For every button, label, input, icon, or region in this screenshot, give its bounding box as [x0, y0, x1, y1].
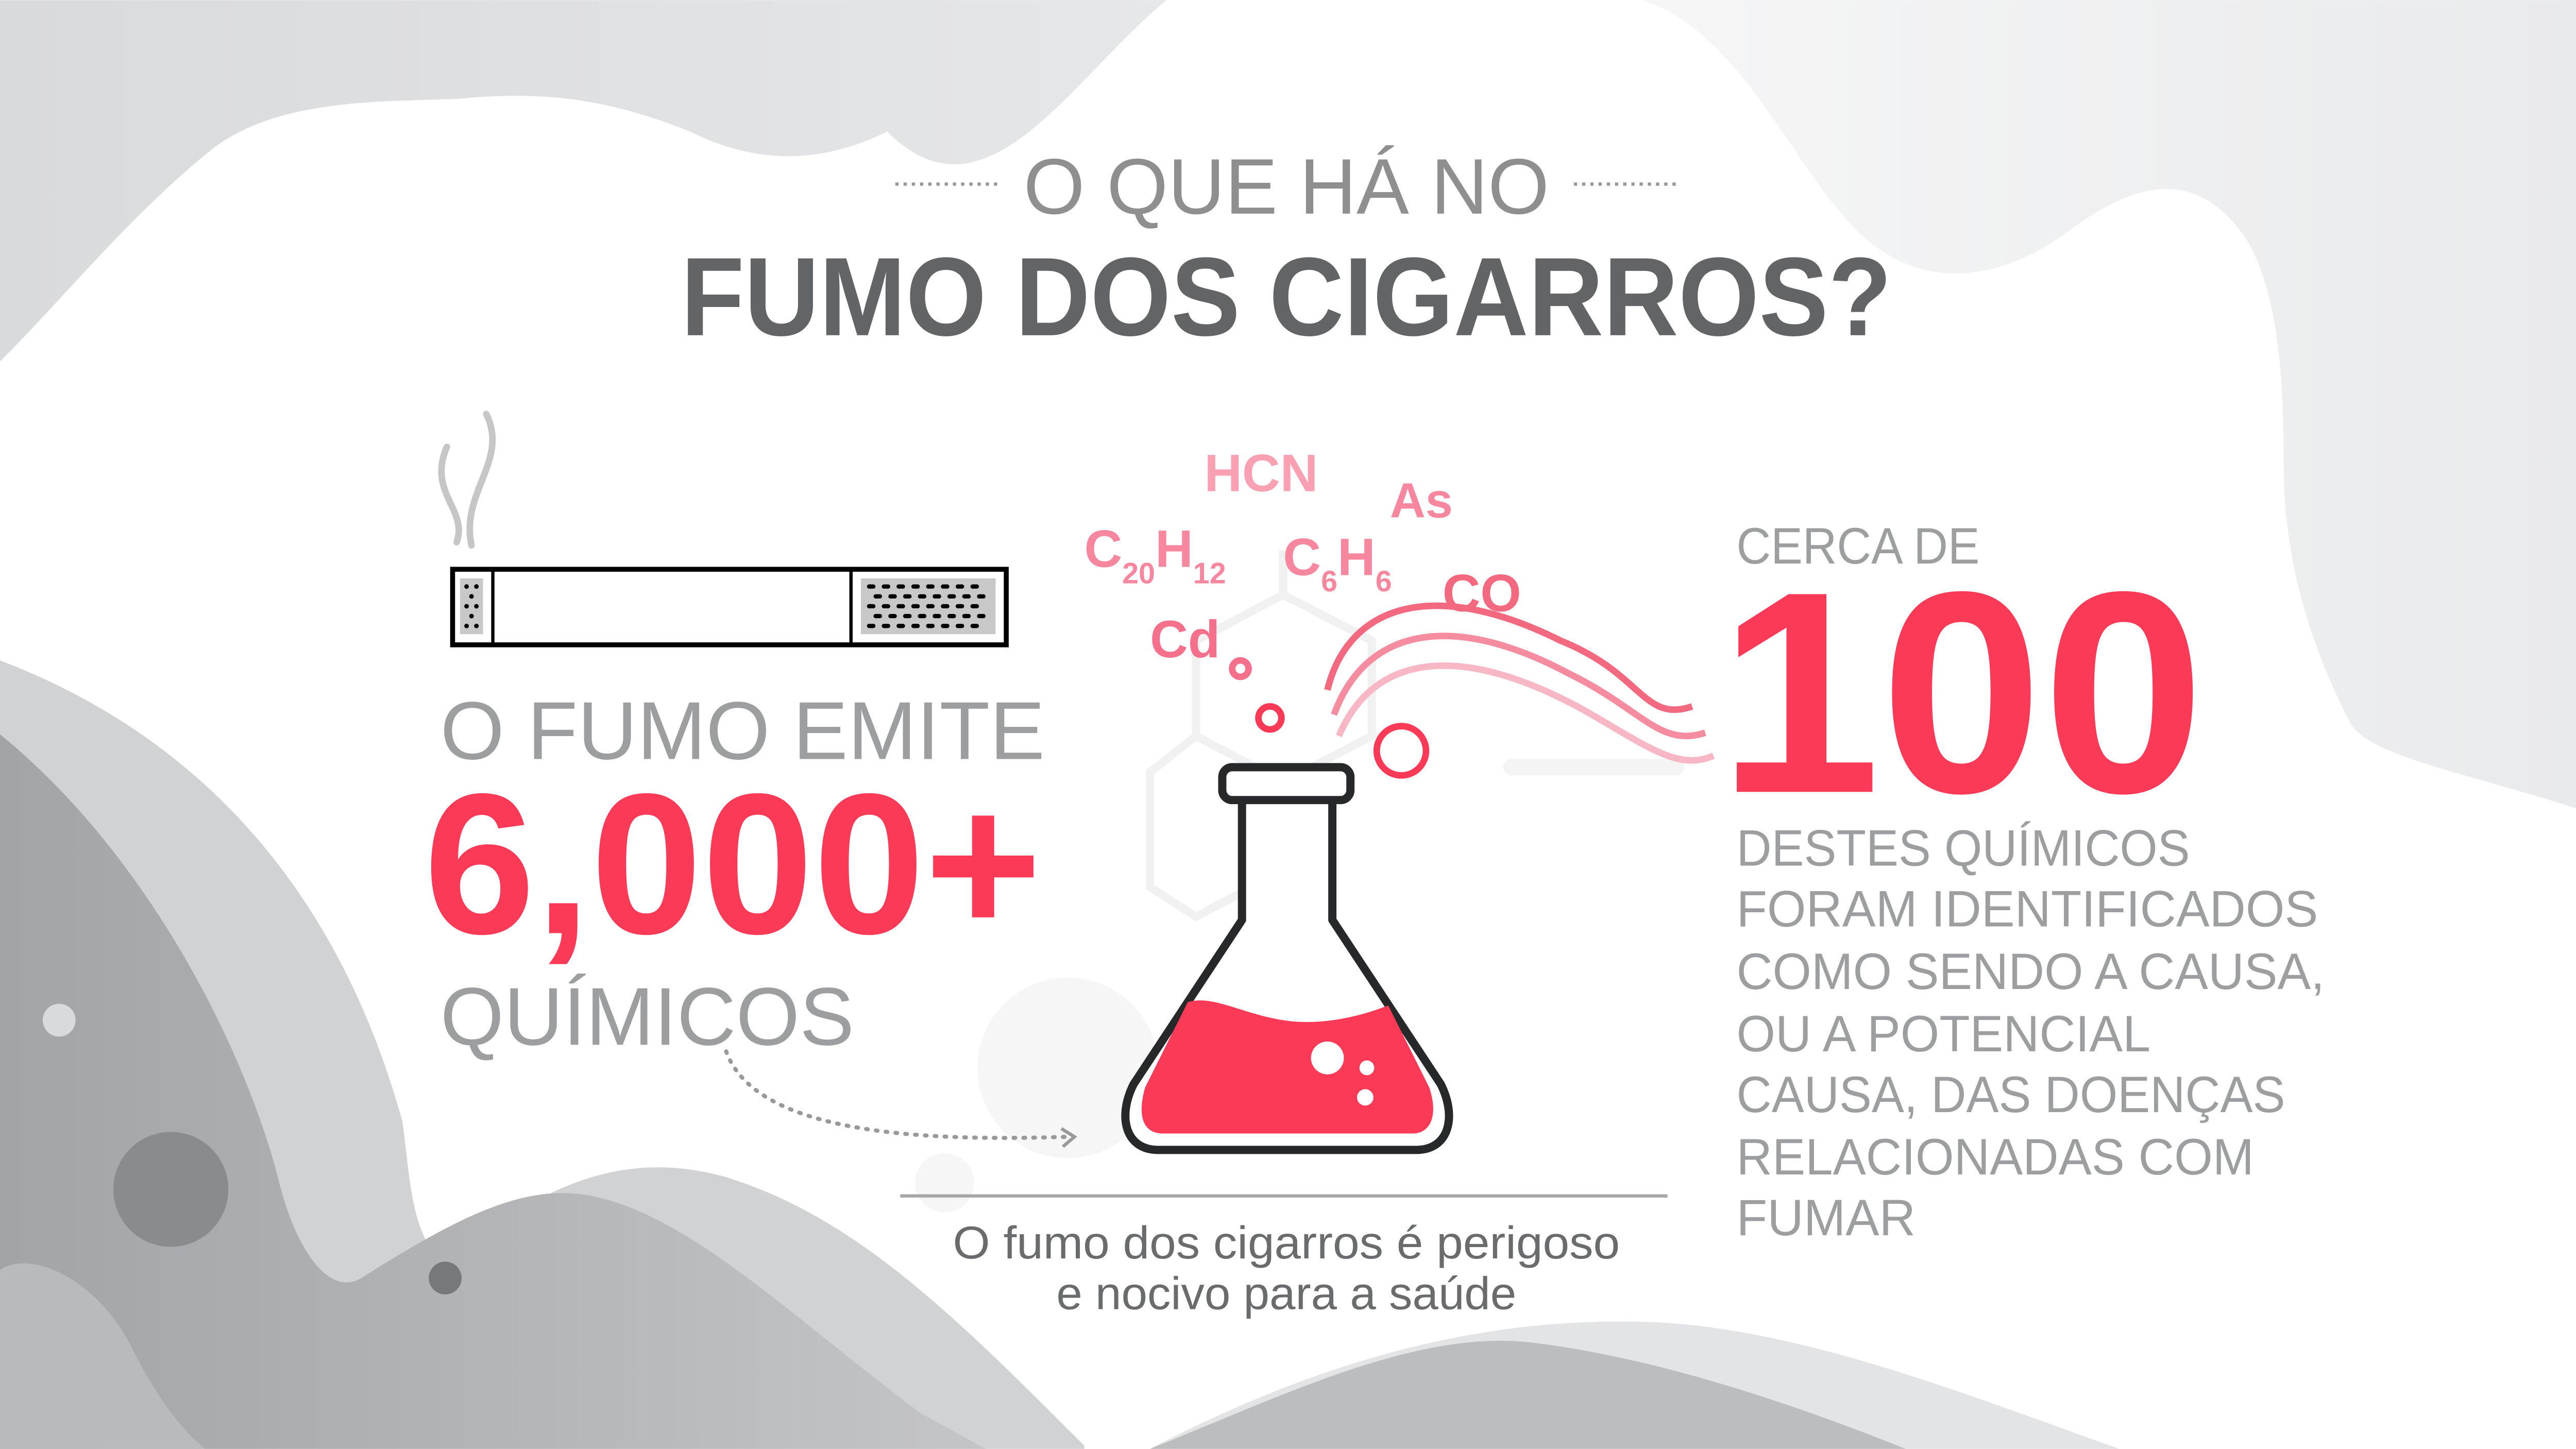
- smoke waves: [1328, 606, 1714, 760]
- chemical formulas: CO: [1443, 564, 1521, 622]
- chemical formulas: C: [1283, 527, 1321, 586]
- chemical formulas: H: [1155, 519, 1193, 578]
- text block: 100 chemicals: [1718, 518, 2325, 1246]
- title: FUMO DOS CIGARROS?: [681, 234, 1892, 359]
- text block: 100 chemicals: 100: [1718, 532, 2205, 853]
- title: [681, 143, 1892, 359]
- text block: 6,000+ chemicals: [424, 685, 1045, 1062]
- text block: 100 chemicals: FORAM IDENTIFICADOS: [1737, 881, 2318, 937]
- icon: cigarette with smoke: [442, 414, 1006, 645]
- text block: 100 chemicals: OU A POTENCIAL: [1737, 1005, 2150, 1062]
- chemical formulas: 20: [1122, 557, 1155, 590]
- decorative circles: [43, 1004, 462, 1294]
- chemical formulas: C: [1084, 519, 1122, 578]
- caption: [900, 1196, 1668, 1319]
- text block: 100 chemicals: RELACIONADAS COM: [1737, 1129, 2254, 1185]
- text block: 6,000+ chemicals: 6,000+: [424, 752, 1042, 976]
- text block: 100 chemicals: FUMAR: [1737, 1189, 1916, 1246]
- title: O QUE HÁ NO: [1024, 143, 1549, 231]
- faint molecule hexagons: [915, 550, 1684, 1213]
- chemical formulas: Cd: [1150, 610, 1220, 669]
- chemical formulas: As: [1390, 473, 1453, 529]
- bubbles: [1232, 660, 1426, 775]
- caption: O fumo dos cigarros é perigoso: [953, 1217, 1620, 1268]
- text block: 100 chemicals: CAUSA, DAS DOENÇAS: [1737, 1066, 2285, 1123]
- text block: 6,000+ chemicals: O FUMO EMITE: [440, 685, 1045, 776]
- text block: 100 chemicals: DESTES QUÍMICOS: [1737, 820, 2190, 877]
- text block: 100 chemicals: COMO SENDO A CAUSA,: [1737, 943, 2325, 1000]
- text block: 100 chemicals: CERCA DE: [1737, 518, 1979, 574]
- chemical formulas: 12: [1193, 557, 1226, 590]
- caption: e nocivo para a saúde: [1056, 1268, 1516, 1319]
- icon: flask: [1125, 767, 1449, 1150]
- text block: 6,000+ chemicals: QUÍMICOS: [440, 970, 854, 1062]
- chemical formulas: H: [1337, 527, 1376, 586]
- arrow: dotted to flask: [726, 1051, 1074, 1147]
- chemical formulas: [1084, 444, 1521, 669]
- chemical formulas: 6: [1376, 565, 1392, 598]
- chemical formulas: 6: [1321, 565, 1337, 598]
- chemical formulas: HCN: [1204, 444, 1318, 503]
